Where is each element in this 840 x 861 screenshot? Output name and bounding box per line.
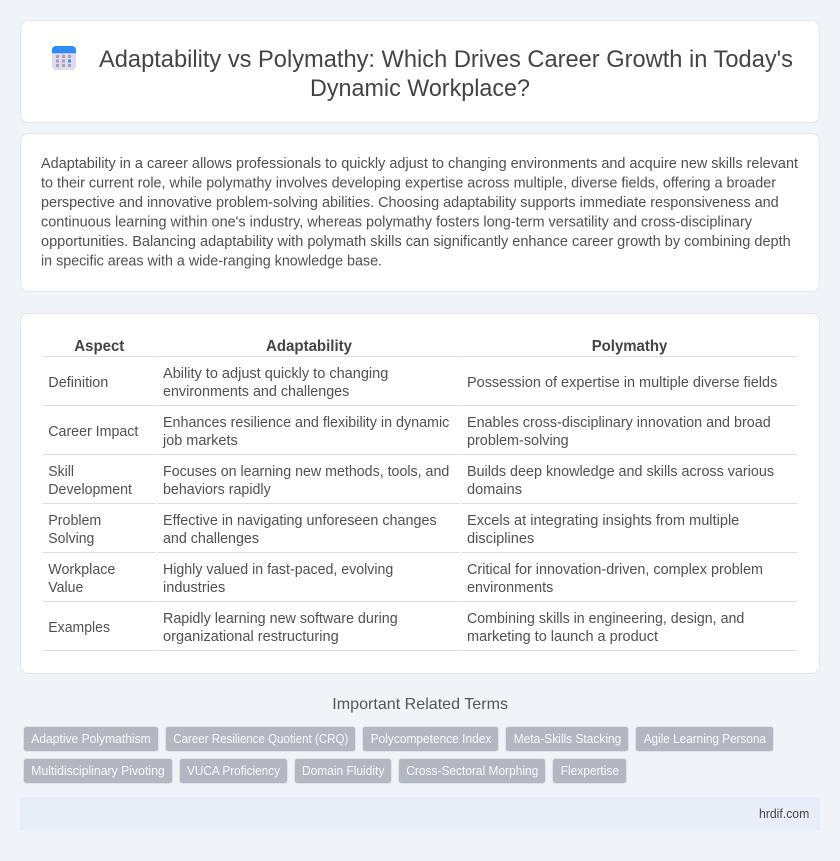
table row: definition: Possession of expertise in multiple diverse fields <box>467 375 777 391</box>
table row: examples: Combining skills in engineering, design, and <box>467 611 744 627</box>
table row: problem solving: and challenges <box>163 531 259 547</box>
title: Dynamic Workplace? <box>310 75 530 102</box>
tag list: related terms: Meta-Skills Stacking <box>514 731 621 746</box>
tag list: related terms: Adaptive Polymathism <box>31 731 151 746</box>
table row: career impact <box>43 415 797 455</box>
table row: workplace value <box>43 562 797 602</box>
table header row: Aspect <box>74 338 125 355</box>
title: Adaptability vs Polymathy: Which Drives Career Growth in Today's <box>99 46 793 73</box>
footer bar <box>20 797 820 831</box>
text block: summary: opportunities. Balancing adaptability with polymath skills can significantly enhance career growth by combining depth <box>41 234 791 250</box>
table header row <box>43 338 797 357</box>
panel: summary paragraph <box>20 134 820 292</box>
text block: summary: to their current role, while polymathy involves developing expertise across multiple, diverse fields, offering a broader <box>41 176 776 192</box>
table row: skill development: Focuses on learning new methods, tools, and <box>163 464 449 480</box>
table header row: Polymathy <box>592 338 667 355</box>
table row: problem solving: Effective in navigating unforeseen changes <box>163 513 437 529</box>
table row: career impact: job markets <box>162 433 238 449</box>
table row: workplace value: Workplace <box>48 562 115 578</box>
table row: definition: Ability to adjust quickly to changing <box>163 366 388 382</box>
text block: summary: Adaptability in a career allows professionals to quickly adjust to changing environments and acquire new skills relevant <box>41 156 798 172</box>
table row: workplace value: industries <box>163 580 225 596</box>
tag list: related terms: Cross-Sectoral Morphing <box>406 763 538 778</box>
panel: comparison table <box>20 314 820 674</box>
table row: career impact: Career Impact <box>48 424 138 440</box>
table row: workplace value: Value <box>48 580 83 596</box>
table row: problem solving: Excels at integrating insights from multiple <box>467 513 739 529</box>
table row: skill development: Skill <box>48 464 74 480</box>
text block: summary: perspective and innovative problem-solving abilities. Choosing adaptability supports immediate responsiveness and <box>41 195 779 211</box>
table row: definition: Definition <box>48 375 108 391</box>
table row: career impact: Enables cross-disciplinary innovation and broad <box>467 415 771 431</box>
tag list: related terms: VUCA Proficiency <box>187 763 281 778</box>
footer source label: hrdif.com <box>759 806 809 821</box>
table row: problem solving: disciplines <box>467 531 534 547</box>
table row: skill development <box>43 464 797 504</box>
table row: examples: marketing to launch a product <box>467 629 658 645</box>
table row: workplace value: Highly valued in fast-paced, evolving <box>163 562 393 578</box>
table row: problem solving: Solving <box>48 531 94 547</box>
table row: examples: Examples <box>48 620 110 636</box>
table row: skill development: behaviors rapidly <box>163 482 271 498</box>
text block: summary <box>41 156 798 270</box>
text block: summary: continuous learning within one's industry, whereas polymathy fosters long-term versatility and cross-disciplinary <box>41 214 753 230</box>
panel: title header <box>20 20 820 122</box>
title <box>99 46 793 102</box>
tag list: related terms: Flexpertise <box>561 763 619 778</box>
table header row: Adaptability <box>266 338 352 355</box>
tag list: related terms: Domain Fluidity <box>302 763 385 778</box>
tag list: related terms: Multidisciplinary Pivoting <box>31 763 165 778</box>
tag list: related terms: Polycompetence Index <box>371 731 492 746</box>
table row: skill development: domains <box>467 482 522 498</box>
table row: examples <box>43 611 797 651</box>
table row: definition <box>43 366 797 406</box>
table row: examples: organizational restructuring <box>163 629 339 645</box>
table row: workplace value: Critical for innovation-driven, complex problem <box>467 562 763 578</box>
table row: workplace value: environments <box>467 580 553 596</box>
text block: summary: in specific areas with a wide-ranging knowledge base. <box>41 254 382 270</box>
table row: career impact: Enhances resilience and flexibility in dynamic <box>163 415 449 431</box>
table row: skill development: Development <box>48 482 132 498</box>
table row: career impact: problem-solving <box>467 433 569 449</box>
table row: problem solving <box>43 513 797 553</box>
table row: skill development: Builds deep knowledge and skills across various <box>467 464 774 480</box>
table row: problem solving: Problem <box>48 513 101 529</box>
tag list: related terms: Agile Learning Persona <box>644 731 767 746</box>
table row: definition: environments and challenges <box>163 384 349 400</box>
icon: calendar <box>52 46 76 70</box>
heading: related terms: Important Related Terms <box>332 696 508 713</box>
tag list: related terms: Career Resilience Quotient (CRQ) <box>173 731 348 746</box>
tag list: related terms <box>24 726 774 784</box>
table row: examples: Rapidly learning new software during <box>163 611 398 627</box>
